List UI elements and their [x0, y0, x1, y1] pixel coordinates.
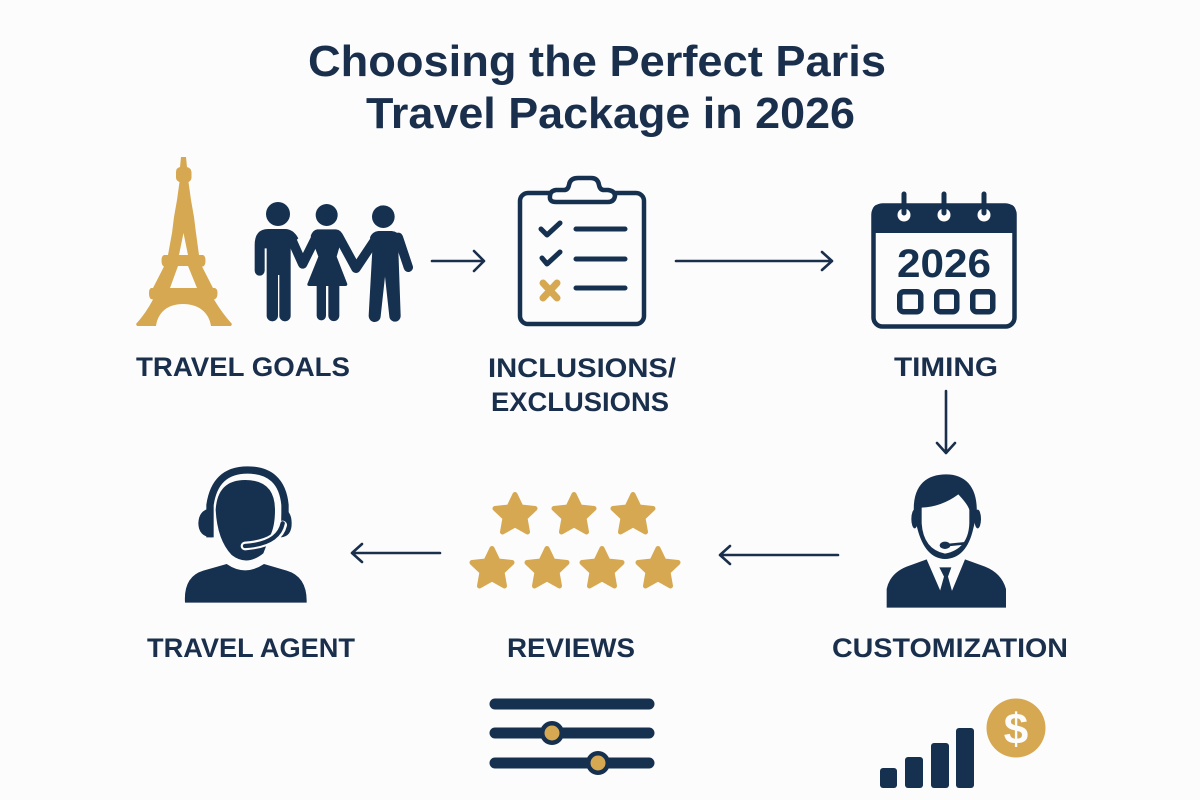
label: customization: CUSTOMIZATION [832, 633, 1068, 663]
panel: customization [832, 474, 1068, 663]
label: reviews: REVIEWS [507, 633, 635, 663]
label: inclusions / exclusions [488, 353, 677, 417]
title: Travel Package in 2026 [366, 89, 855, 138]
icon: rising bars with dollar coin: $ [1004, 705, 1028, 754]
arrow: customization to reviews [720, 546, 838, 564]
icon: man with headset [887, 474, 1006, 608]
label: timing: TIMING [894, 352, 998, 382]
icon: rising bars with dollar coin [880, 698, 1046, 788]
icon: seven gold stars [472, 494, 678, 586]
icon: filter sliders [495, 704, 649, 773]
icon: agent silhouette with headset [185, 470, 307, 603]
arrow: reviews to travel agent [352, 544, 440, 562]
title: Choosing the Perfect Paris [308, 37, 886, 86]
label: inclusions / exclusions: EXCLUSIONS [491, 387, 669, 417]
arrow: inclusions to timing [676, 252, 832, 270]
panel: travel goals [136, 157, 408, 382]
icon: family of three holding hands [255, 202, 408, 322]
panel: travel agent [147, 470, 356, 663]
arrow: timing to customization [937, 391, 955, 453]
label: travel agent: TRAVEL AGENT [147, 633, 356, 663]
label: travel goals: TRAVEL GOALS [136, 352, 350, 382]
panel: timing [872, 194, 1016, 382]
title [308, 37, 886, 138]
label: inclusions / exclusions: INCLUSIONS/ [488, 353, 677, 383]
icon: clipboard checklist [520, 178, 644, 324]
icon: 2026 calendar [872, 194, 1016, 326]
panel: inclusions and exclusions [488, 178, 677, 417]
arrow: goals to inclusions [432, 251, 484, 271]
panel: reviews [472, 494, 678, 663]
icon: 2026 calendar: 2026 [897, 242, 991, 286]
icon: Eiffel Tower [136, 157, 232, 326]
